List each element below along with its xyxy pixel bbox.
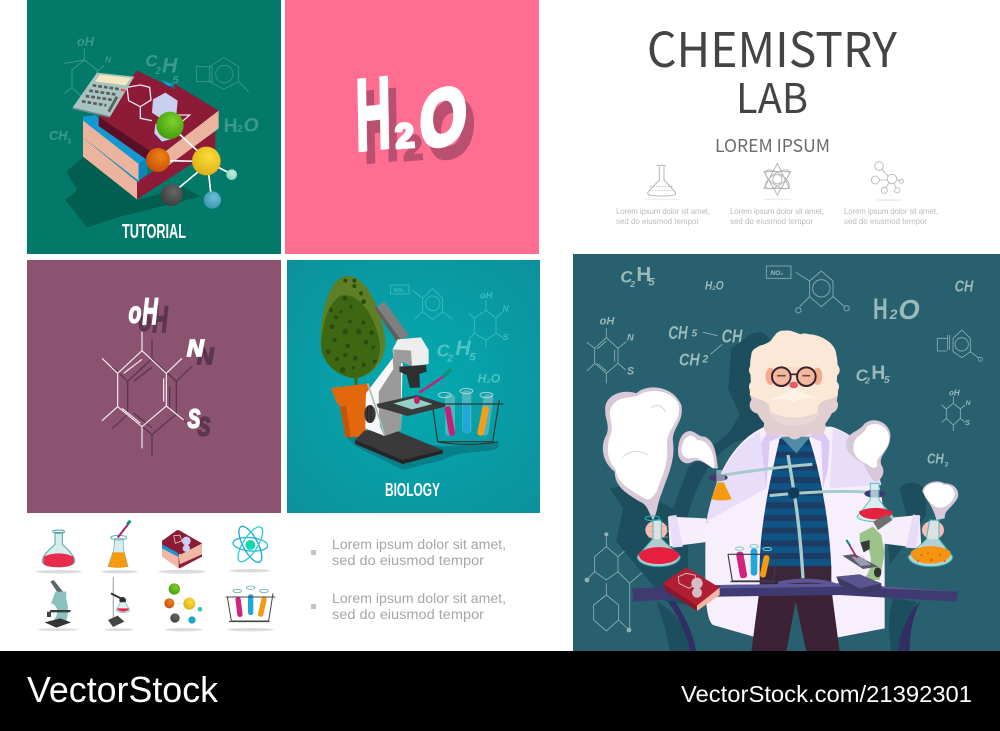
chalk formulas on scientist panel: 2 [864,376,870,386]
chalk formulas on tutorial panel: 2 [154,66,161,77]
microscope [355,302,451,464]
right hanging smoke [846,420,890,482]
molecule: N [187,335,205,361]
molecule: o [129,297,141,330]
chalk formulas on biology panel: NO₂ [393,288,405,294]
chalk formulas on scientist panel: CH [668,322,688,343]
icon shadows [35,569,274,631]
panel: molecule purple [27,260,281,513]
molecule shadow [112,298,215,456]
chalk formulas on scientist panel: 5 [648,277,655,289]
chalk formulas on scientist panel: H [871,363,885,384]
chalk formulas on scientist panel: oH [949,389,960,398]
footer url: VectorStock.com/21392301 [681,681,972,707]
icon: molecule balls [164,583,202,624]
bullet list: Lorem ipsum dolor sit amet, [332,537,506,552]
chalk formulas on biology panel: S [503,332,509,342]
chalk formulas on tutorial panel: H [162,54,178,78]
bullet: second [311,604,316,609]
small microscope [836,514,892,593]
chalk formulas on scientist panel: H [873,293,888,326]
bullet list: sed do eiusmod tempor [332,607,485,622]
right hanging flask [857,483,894,522]
H2O shadow: 2 [402,129,424,168]
table [632,583,958,652]
chalk formulas on biology panel: 2 [446,354,453,365]
heading: biology: BIOLOGY [385,480,440,500]
title [647,11,897,125]
icon: line molecule [871,162,903,201]
right smoke [922,481,958,520]
chalk formulas on scientist panel: H [636,263,651,286]
chalk formulas on scientist panel: CH [722,325,743,346]
icon: flask on stand [108,577,130,627]
small smoke [678,431,718,468]
apparatus rods [709,455,886,578]
feature captions: sed do eiusmod tempor [730,217,813,226]
icon: line atom [762,163,792,200]
right hand and orange flask [908,520,953,567]
feature captions: Lorem ipsum dolor sit amet, [730,207,824,216]
title: CHEMISTRY [647,11,897,81]
chalk formulas on scientist panel [600,263,974,468]
chalk formulas on biology panel: N [503,305,509,314]
chalk formulas on scientist panel: CH [927,452,944,468]
chalk formulas on tutorial panel [49,35,259,145]
chalk formulas on scientist panel: 2 [629,279,635,289]
face and glasses [766,367,822,402]
molecule shadow: N [197,343,215,369]
test tube rack [728,545,777,582]
icon: red flask [42,530,75,567]
icon: test tubes [226,586,275,622]
book [662,567,720,611]
icon: books [162,530,202,568]
chalk formulas on biology panel: H [455,336,471,360]
chalk formulas on tutorial panel: CH [49,129,68,143]
chalk formulas on scientist panel: NO₂ [770,270,783,277]
bullet list: Lorem ipsum dolor sit amet, [332,591,506,606]
lab coat [705,427,885,639]
chalk formulas on scientist panel: CH [679,350,700,370]
left hand and red flask [637,516,680,567]
shadow of books [65,155,200,227]
plant [321,276,385,437]
chalk formulas on scientist panel: N [966,400,971,407]
chalk formulas on scientist panel: 2 [701,353,708,365]
footer logo: VectorStock [27,669,219,710]
feature captions: sed do eiusmod tempor [844,217,927,226]
feature captions: Lorem ipsum dolor sit amet, [616,207,710,216]
chalk formulas on scientist panel: S [965,418,970,427]
chalk formulas on scientist panel: O [898,294,920,325]
H2O lettering: H [354,54,392,173]
subtitle: LOREM IPSUM [715,132,830,158]
chalk formulas on tutorial panel: C [145,52,158,71]
left smoke [603,387,682,520]
stack of books [83,71,219,199]
chalk formulas on tutorial panel: O [244,115,259,136]
H2O lettering [354,54,467,173]
floor shadow [344,433,499,470]
feature row [616,162,938,226]
chalk formulas on tutorial panel: N [105,54,112,64]
chalk formulas on scientist panel: 5 [884,375,890,386]
molecule shadow: S [198,412,211,442]
chalk formulas on biology panel: 5 [469,352,476,364]
panel: tutorial [27,0,281,254]
H2O shadow: O [428,80,475,179]
footer band [0,651,1000,731]
arm sleeves [668,515,921,548]
heading: tutorial: TUTORIAL [122,221,186,243]
H2O shadow: H [362,66,400,185]
striped vest [760,438,831,568]
beard and hair [749,330,840,439]
molecule: H [142,290,158,332]
chalk formulas on tutorial panel: 3 [67,136,71,145]
chalk molecule lines [585,266,982,632]
trousers [751,588,840,652]
chalk formulas on biology panel: oH [480,290,493,300]
molecule: S [188,404,201,434]
chalk formulas on tutorial panel: 2 [237,124,243,135]
molecule shadow: o [139,305,151,338]
molecule print on book cover [127,85,190,142]
open book on table [778,579,836,586]
panel: H2O pink [285,0,539,254]
chalk formulas on scientist panel: 3 [944,461,948,468]
chalk formulas on tutorial panel: H [224,116,238,137]
chalk formulas on scientist panel: 5 [692,328,698,339]
H2O lettering: 2 [394,117,416,156]
shirt collar [780,437,810,453]
H2O lettering: O [420,68,467,167]
bullet list [311,537,506,622]
bullet list: sed do eiusmod tempor [332,553,485,568]
icon: line flask [643,165,680,200]
chalk formulas on scientist panel: C [856,366,869,385]
chalk formulas on biology panel: C [437,341,451,361]
chalk formulas on scientist panel: H₂O [705,279,724,293]
chalk formulas on scientist panel: oH [600,315,615,327]
chalk formulas on scientist panel: C [620,267,633,286]
chalk formulas on scientist panel: 2 [889,306,898,322]
molecule model [146,112,237,209]
icon grid [35,521,275,631]
chalk formulas on biology panel: H₂O [478,372,501,386]
panel: scientist [573,254,1000,652]
feature captions: sed do eiusmod tempor [616,217,699,226]
chalk formulas on scientist panel: S [627,365,634,377]
icon: small microscope [45,580,71,628]
icon: orange flask [108,521,130,568]
chalk formulas on scientist panel: N [627,332,634,342]
chalk formulas on scientist panel: CH [955,279,974,296]
title: LAB [736,65,808,125]
chalk formulas on biology panel [391,285,509,386]
chalk formulas on tutorial panel: 5 [172,74,179,86]
chalk formulas on tutorial panel: oH [77,35,95,49]
calculator [73,73,134,118]
test tube rack [432,388,503,444]
icon: atom [232,523,268,565]
molecule shadow: H [152,298,168,340]
molecule [102,290,205,448]
panel: biology [287,260,540,513]
bullet: first [311,550,316,555]
H2O shadow [362,66,475,185]
small hanging flask [711,470,732,500]
feature captions: Lorem ipsum dolor sit amet, [844,207,938,216]
feature captions [616,207,938,226]
scientist shadow [610,332,770,605]
